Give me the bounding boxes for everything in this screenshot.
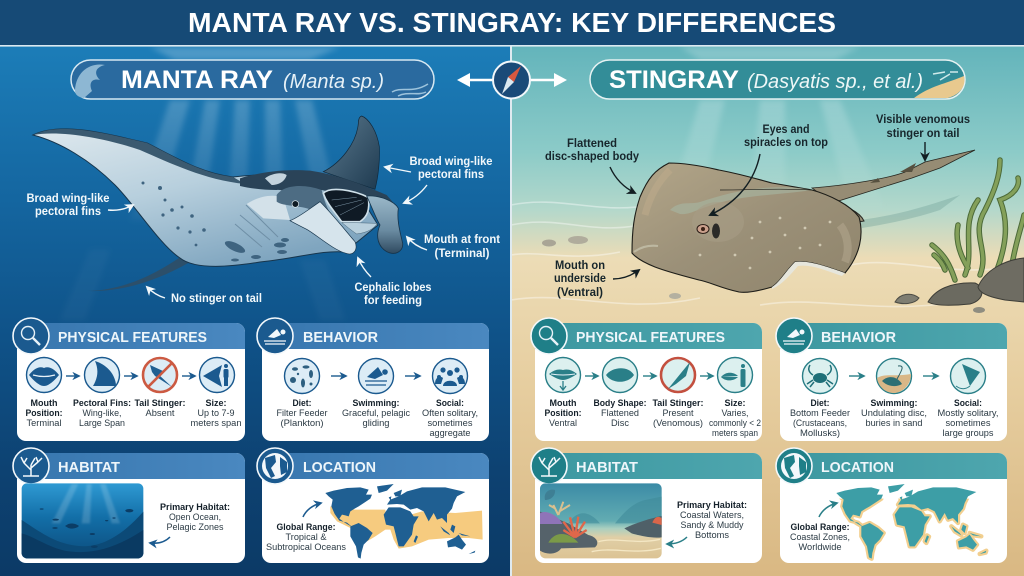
text: primary habitat: Sandy & Muddy — [680, 520, 744, 531]
wing top edge shading — [33, 129, 245, 184]
arrow — [819, 503, 837, 517]
text: social: Often solitary, — [422, 408, 478, 419]
panel: manta habitat — [13, 448, 245, 563]
icon: mouth terminal — [26, 358, 62, 392]
text: global range — [266, 522, 346, 553]
text: social: Mostly solitary, — [938, 408, 998, 419]
text: primary habitat: Primary Habitat: — [160, 502, 230, 513]
callout: venomous stinger — [876, 112, 970, 160]
spiracle — [712, 224, 720, 238]
icon: swimmer badge — [776, 318, 812, 354]
callout: no stinger: No stinger on tail — [171, 291, 262, 305]
icon: size — [718, 358, 752, 392]
callout: mouth at front — [407, 232, 500, 260]
text: swimming: Undulating disc, — [861, 408, 927, 419]
icon: globe badge — [776, 448, 812, 484]
tail — [88, 256, 190, 291]
icon: size — [200, 358, 234, 392]
red coral — [652, 517, 662, 525]
text: size: meters span — [190, 418, 242, 429]
distant reef — [568, 497, 662, 523]
heading: manta ray banner: (Manta sp.) — [283, 71, 384, 93]
arrow — [585, 375, 598, 377]
text: tail stinger — [652, 398, 704, 429]
pebbles — [542, 240, 556, 246]
callout: pectoral fins right — [385, 154, 493, 203]
text: size: Varies, — [722, 408, 748, 419]
panel: manta location: LOCATION — [303, 459, 376, 476]
arrow — [667, 537, 687, 544]
text: size: Size: — [724, 398, 746, 409]
shadow — [860, 195, 960, 228]
eye mound — [692, 202, 744, 242]
icon: plankton diet — [284, 358, 320, 394]
eye — [697, 224, 709, 234]
text: social: aggregate — [430, 428, 470, 439]
back ridge — [670, 187, 812, 214]
panel: manta behavior: BEHAVIOR — [303, 329, 378, 346]
icon: flattened disc — [602, 358, 638, 392]
callout: pectoral fins left — [26, 191, 133, 218]
text: global range: Coastal Zones, — [790, 532, 850, 543]
callout: mouth underside: Mouth on — [555, 258, 605, 272]
text: diet: (Crustaceans, — [793, 418, 847, 429]
panel: stingray physical features: PHYSICAL FEATURES — [576, 329, 725, 346]
panel: stingray location — [776, 448, 1007, 563]
spots — [699, 217, 831, 269]
heading: manta ray banner: MANTA RAY — [121, 66, 273, 94]
text: primary habitat: Bottoms — [695, 530, 729, 541]
callout: venomous stinger: Visible venomous — [876, 112, 970, 126]
text: body shape — [594, 398, 646, 429]
callout: flattened body — [545, 136, 639, 193]
text: pectoral fins: Wing-like, — [82, 408, 122, 419]
text: tail stinger: Absent — [146, 408, 175, 419]
panel: stingray physical features — [531, 318, 762, 441]
mouth cavity — [323, 189, 369, 222]
text: diet: Mollusks) — [800, 428, 840, 439]
heading: stingray banner — [590, 60, 965, 99]
icon: ray group — [950, 358, 986, 394]
arrow — [66, 375, 79, 377]
callout: eyes and spiracles: Eyes and — [762, 122, 810, 136]
tan coral — [549, 502, 570, 515]
callout: pectoral fins left: pectoral fins — [35, 204, 101, 218]
left rocks — [540, 512, 597, 554]
text: tail stinger — [134, 398, 186, 419]
panel: stingray behavior: BEHAVIOR — [821, 329, 896, 346]
text: body shape: Body Shape: — [594, 398, 646, 409]
icon: crab — [802, 358, 838, 394]
head mass — [277, 186, 333, 218]
text: pectoral fins: Pectoral Fins: — [73, 398, 131, 409]
text: tail stinger: Tail Stinger: — [134, 398, 186, 409]
text: swimming: Graceful, pelagic — [342, 408, 410, 419]
text: diet: Filter Feeder — [276, 408, 328, 419]
callout: eyes and spiracles — [710, 122, 828, 215]
arrow — [303, 503, 321, 517]
dark back band — [240, 170, 397, 207]
arrow — [331, 375, 346, 377]
text: tail stinger: Tail Stinger: — [652, 398, 704, 409]
text: primary habitat: Coastal Waters, — [680, 510, 744, 521]
chart: world map tropical range — [325, 484, 483, 559]
text: primary habitat — [677, 500, 747, 541]
text: social — [422, 398, 478, 439]
text: mouth position — [544, 398, 582, 429]
heading: stingray banner: STINGRAY — [609, 66, 739, 94]
sand ripples — [592, 539, 661, 552]
text: swimming: Swimming: — [352, 398, 400, 409]
icon: compass with arrows — [457, 62, 567, 98]
text: diet: Diet: — [292, 398, 312, 409]
text: diet — [790, 398, 850, 439]
gill slits — [235, 205, 278, 247]
head detail in zoom coordinates — [240, 116, 403, 254]
callout: venomous stinger: stinger on tail — [886, 126, 960, 140]
icon: social group — [432, 358, 468, 394]
seaweed — [932, 160, 1024, 280]
arrow — [923, 375, 938, 377]
arrow — [124, 375, 137, 377]
panel: manta physical features: PHYSICAL FEATURES — [58, 329, 207, 346]
illustration: manta ray — [33, 116, 403, 291]
text: global range: Subtropical Oceans — [266, 542, 346, 553]
text: size: Size: — [206, 398, 226, 409]
purple coral — [540, 512, 562, 524]
arrow — [700, 375, 713, 377]
callout: eyes and spiracles: spiracles on top — [744, 135, 828, 149]
text: tail stinger: Present — [662, 408, 694, 419]
callout: flattened body: disc-shaped body — [545, 149, 639, 163]
title: MANTA RAY VS. STINGRAY: KEY DIFFERENCES — [188, 7, 836, 38]
green mound — [548, 534, 578, 543]
far cephalic lobe — [367, 196, 403, 253]
icon: magnifier badge — [13, 318, 49, 354]
panel: stingray location: LOCATION — [821, 459, 894, 476]
text: mouth position — [26, 398, 62, 429]
text: diet — [276, 398, 328, 429]
text: social: sometimes — [428, 418, 473, 429]
text: social: Social: — [436, 398, 464, 409]
blue coral — [545, 490, 555, 500]
text: diet: Bottom Feeder — [790, 408, 850, 419]
text: primary habitat: Open Ocean, — [169, 512, 221, 523]
center divider — [510, 46, 512, 576]
text: primary habitat: Pelagic Zones — [166, 522, 224, 533]
icon: swimmer badge — [257, 318, 293, 354]
title bar — [0, 0, 1024, 47]
icon: beach — [914, 76, 964, 98]
callout: cephalic lobes — [354, 258, 432, 307]
icon: buried ray — [876, 358, 912, 394]
text: swimming: gliding — [362, 418, 390, 429]
eye — [292, 201, 299, 207]
panel: manta physical features — [13, 318, 245, 441]
icon: globe badge — [257, 448, 293, 484]
arrow — [849, 375, 864, 377]
image: coastal reef scene — [540, 483, 662, 558]
text: diet: Diet: — [810, 398, 830, 409]
near cephalic lobe — [290, 202, 356, 254]
icon: pectoral fin — [84, 358, 120, 392]
back patch — [265, 173, 287, 185]
far fin — [323, 116, 379, 189]
orange coral — [563, 517, 587, 537]
panel: stingray habitat — [531, 448, 762, 563]
icon: mouth ventral — [546, 358, 580, 392]
callout: mouth underside: underside — [554, 271, 606, 285]
callout: pectoral fins right: Broad wing-like — [410, 154, 493, 168]
callout: cephalic lobes: for feeding — [364, 293, 422, 307]
text: pectoral fins: Large Span — [79, 418, 125, 429]
text: mouth position: Position: — [544, 408, 582, 419]
icon: magnifier badge — [531, 318, 567, 354]
text: mouth position: Mouth — [30, 398, 58, 409]
callout: no stinger — [147, 287, 262, 305]
text: size — [709, 398, 761, 439]
text: size: Up to 7-9 — [198, 408, 234, 419]
belly rim — [772, 262, 845, 289]
body and wing — [33, 129, 378, 266]
text: size — [190, 398, 242, 429]
text: global range: Global Range: — [790, 522, 850, 533]
callout: pectoral fins right: pectoral fins — [418, 167, 484, 181]
callout: mouth at front: (Terminal) — [434, 246, 490, 260]
callout: cephalic lobes: Cephalic lobes — [354, 280, 432, 294]
text: social — [938, 398, 998, 439]
text: global range — [790, 522, 850, 553]
arrow — [643, 375, 656, 377]
text: swimming — [861, 398, 927, 429]
text: body shape: Flattened — [601, 408, 639, 419]
rocks — [928, 283, 982, 305]
callout: pectoral fins left: Broad wing-like — [26, 191, 110, 205]
text: size: commonly < 2 — [709, 418, 761, 429]
text: swimming: Swimming: — [870, 398, 918, 409]
icon: swimming — [358, 358, 394, 394]
callout: mouth at front: Mouth at front — [424, 232, 500, 246]
text: global range: Worldwide — [798, 542, 842, 553]
text: mouth position: Position: — [26, 408, 62, 419]
icon: wave — [75, 64, 105, 98]
text: mouth position: Mouth — [550, 398, 577, 409]
lower mouth lip — [342, 222, 377, 234]
text: global range: Tropical & — [286, 532, 327, 543]
arrow — [150, 537, 170, 543]
wing spots — [142, 182, 289, 262]
right panel: sandy seabed background — [511, 46, 1024, 576]
panel: manta location — [257, 448, 489, 563]
callout: mouth underside — [554, 258, 639, 299]
seafloor — [22, 512, 143, 558]
text: pectoral fins — [73, 398, 131, 429]
illustration: stingray — [542, 150, 1024, 313]
panel: manta habitat: HABITAT — [58, 459, 120, 476]
text: diet: (Plankton) — [280, 418, 324, 429]
text: social: large groups — [942, 428, 994, 439]
text: primary habitat: Primary Habitat: — [677, 500, 747, 511]
panel: manta behavior — [257, 318, 489, 441]
right rocks — [624, 516, 662, 538]
callout: mouth underside: (Ventral) — [557, 285, 603, 299]
text: primary habitat — [160, 502, 230, 533]
icon: coral badge — [13, 448, 49, 484]
icon: stinger present — [661, 358, 695, 392]
pale side panel — [247, 196, 290, 220]
panel: stingray behavior — [776, 318, 1007, 441]
icon: no stinger — [143, 358, 177, 392]
image: open ocean scene — [22, 483, 143, 558]
callout: flattened body: Flattened — [567, 136, 617, 150]
icon: coral badge — [531, 448, 567, 484]
text: mouth position: Terminal — [26, 418, 62, 429]
text: size: meters span — [712, 428, 758, 439]
text: social: sometimes — [946, 418, 991, 429]
chart: world map coastal range — [836, 484, 986, 559]
heading: stingray banner: (Dasyatis sp., et al.) — [747, 71, 923, 93]
tail — [812, 150, 975, 203]
text: swimming: buries in sand — [866, 418, 922, 429]
text: global range: Global Range: — [276, 522, 336, 533]
fish — [40, 508, 133, 548]
text: mouth position: Ventral — [549, 418, 577, 429]
panel: stingray habitat: HABITAT — [576, 459, 638, 476]
arrow — [405, 375, 420, 377]
text: body shape: Disc — [611, 418, 629, 429]
text: tail stinger: (Venomous) — [653, 418, 703, 429]
text: swimming — [342, 398, 410, 429]
heading: manta ray banner — [71, 60, 434, 99]
left panel: ocean background — [0, 46, 511, 576]
rear fin — [830, 202, 864, 221]
disc — [632, 163, 861, 292]
text: social: Social: — [954, 398, 982, 409]
arrow — [182, 375, 195, 377]
